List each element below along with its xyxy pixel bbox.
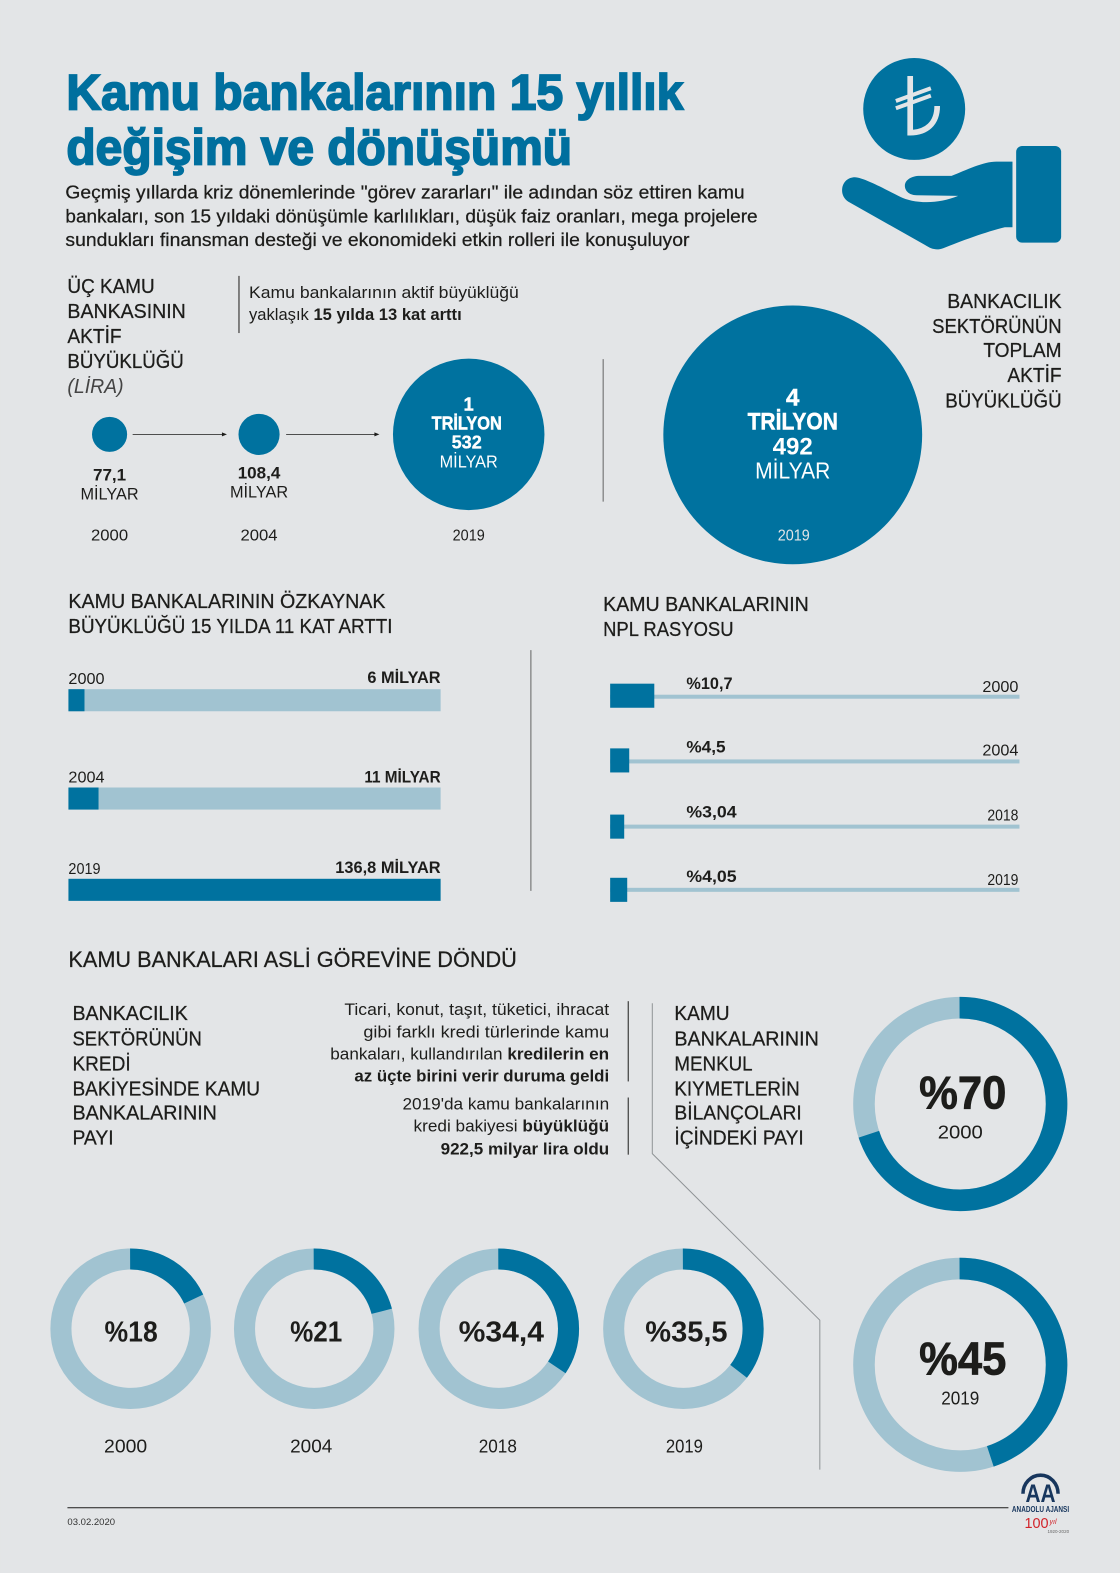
bubble 2019: TRİLYON [432,413,502,433]
donut: credit 2004: 2004 [290,1437,332,1457]
bubble 2019: MİLYAR [440,451,498,471]
donut: credit 2004 [244,1259,384,1457]
intro text [65,183,758,250]
NPL 2004: 2004 [982,741,1019,759]
logo: Anadolu Ajansı: 1920-2020 [1048,1529,1070,1534]
logo: Anadolu Ajansı: AA [1025,1480,1056,1508]
bar 2000: 6 MİLYAR [367,668,441,687]
callout: 13-fold [239,276,519,333]
NPL 2018: %3,04 [686,803,737,822]
bar 2004 [68,767,441,810]
NPL 2000 [610,674,1019,708]
heading: credit share: BANKACILIK [72,1003,188,1025]
title: değişim ve dönüşümü [66,120,572,176]
logo: Anadolu Ajansı: yıl [1049,1519,1057,1526]
donut: credit 2018: 2018 [479,1437,517,1457]
donut: securities 2000 [864,1008,1057,1200]
date: 03.02.2020 [67,1517,115,1528]
bubble 2019 [393,359,544,545]
donut: securities 2000: 2000 [938,1123,983,1143]
donut: credit 2000: 2000 [104,1437,147,1457]
callout: 13-fold: Kamu bankalarının aktif büyüklüğü [249,283,519,302]
bubble 2004: 2004 [240,527,278,545]
callout: loan types: az üçte birini verir duruma geldi [354,1066,609,1085]
bubble: sector total: TRİLYON [748,408,838,435]
heading: sector: SEKTÖRÜNÜN [932,316,1062,338]
bubble 2000 [80,417,139,545]
bar 2019: 2019 [68,860,101,878]
panel: sector assets [663,291,1062,564]
icon: hand holding lira coin [842,58,1061,249]
intro text: Geçmiş yıllarda kriz dönemlerinde "görev zararları" ile adından söz ettiren kamu [65,183,745,203]
NPL 2019: 2019 [987,871,1019,889]
callout: 13-fold: yaklaşık 15 yılda 13 kat arttı [249,305,462,324]
heading: sector: BANKACILIK [947,291,1062,313]
callout: loan types: Ticari, konut, taşıt, tüketici, ihracat [344,1000,610,1019]
NPL 2004: %4,5 [686,737,726,756]
heading: securities share: BİLANÇOLARI [674,1102,802,1125]
heading: securities share: BANKALARININ [674,1028,819,1050]
heading: sector: TOPLAM [983,340,1062,362]
donut: securities 2019 [864,1269,1057,1461]
bar 2004: 2004 [68,768,105,786]
heading: credit share: BANKALARININ [72,1103,217,1125]
callout: loan types: bankaları, kullandırılan kredilerin en [330,1044,609,1063]
intro text: sundukları finansman desteği ve ekonomideki etkin rolleri ile konuşuluyor [65,230,689,250]
heading: credit share: BAKİYESİNDE KAMU [72,1077,260,1100]
heading: credit share: SEKTÖRÜNÜN [72,1028,202,1050]
donut: securities 2000: %70 [919,1067,1006,1119]
bubble 2004: MİLYAR [230,483,288,502]
bubble: sector total: 4 [786,384,800,411]
bar 2004: 11 MİLYAR [364,767,441,786]
section heading: KAMU BANKALARI ASLİ GÖREVİNE DÖNDÜ [68,947,517,972]
callout: loan balance: 2019'da kamu bankalarının [402,1095,609,1114]
donut: credit 2000 [61,1259,200,1457]
donut: credit 2019 [614,1259,753,1457]
intro text: bankaları, son 15 yıldaki dönüşümle karlılıkları, düşük faiz oranları, mega projelere [65,207,758,227]
bubble 2000: 77,1 [93,466,126,485]
bubble 2004 [230,414,288,545]
heading: asset size: ÜÇ KAMU [67,276,155,298]
bubble: sector total: MİLYAR [755,458,830,484]
heading: asset size: AKTİF [67,325,122,348]
NPL 2019 [610,867,1019,902]
bubble 2019: 1 [464,394,474,414]
heading: sector: AKTİF [1007,364,1062,387]
donut: credit 2000: %18 [105,1316,158,1348]
heading: securities share: KIYMETLERİN [674,1077,800,1100]
panel: equity [68,591,441,901]
donut: credit 2018 [429,1259,569,1457]
footer rule [67,1507,1008,1509]
heading: sector [932,291,1062,412]
NPL 2018 [610,803,1019,839]
NPL 2000: %10,7 [686,674,733,693]
logo: Anadolu Ajansı: ANADOLU AJANSI [1012,1504,1069,1514]
donut: securities 2019: 2019 [941,1388,979,1408]
bar 2000 [68,668,441,711]
heading: securities share: İÇİNDEKİ PAYI [674,1127,804,1150]
heading: equity: KAMU BANKALARININ ÖZKAYNAK [68,591,386,613]
bar 2019 [68,858,441,901]
bubble: sector total [663,305,922,564]
bubble 2004: 108,4 [238,464,281,483]
heading: asset size: (LİRA) [67,376,124,398]
bubble 2000: MİLYAR [80,485,139,504]
logo: Anadolu Ajansı [1012,1475,1070,1534]
heading: credit share: KREDİ [72,1052,131,1075]
heading: sector: BÜYÜKLÜĞÜ [945,389,1062,412]
heading: securities share: KAMU [674,1003,730,1025]
bar 2000: 2000 [68,670,105,688]
heading: asset size [67,276,186,398]
heading: asset size: BANKASININ [67,301,186,323]
bubble 2019: 2019 [453,527,485,545]
donut: credit 2018: %34,4 [459,1316,545,1348]
NPL 2019: %4,05 [686,867,737,886]
heading: credit share [72,1003,260,1150]
panel: NPL [603,594,1019,902]
NPL 2000: 2000 [982,678,1019,696]
title [66,64,683,176]
donut: credit 2019: 2019 [666,1437,703,1457]
title: Kamu bankalarının 15 yıllık [66,64,683,120]
donut: securities 2019: %45 [919,1332,1006,1384]
heading: securities share [674,1003,819,1150]
bubble: sector total: 492 [773,433,813,460]
callout: loan balance: kredi bakiyesi büyüklüğü [414,1117,609,1136]
heading: credit share: PAYI [72,1128,114,1150]
callout: loan balance: 922,5 milyar lira oldu [441,1140,609,1159]
logo: Anadolu Ajansı: 100 [1024,1515,1049,1532]
bubble: sector total: 2019 [778,527,810,545]
heading: securities share: MENKUL [674,1053,753,1075]
donut: credit 2019: %35,5 [645,1316,728,1348]
callout: loan balance [402,1095,628,1159]
NPL 2004 [610,737,1019,772]
callout: loan types [330,1000,628,1085]
heading: equity: BÜYÜKLÜĞÜ 15 YILDA 11 KAT ARTTI [68,615,392,638]
bar 2019: 136,8 MİLYAR [335,858,441,877]
bubble 2019: 532 [452,432,482,452]
donut: credit 2004: %21 [290,1316,342,1348]
NPL 2018: 2018 [987,807,1019,825]
heading: NPL: NPL RASYOSU [603,619,734,641]
callout: loan types: gibi farklı kredi türlerinde kamu [363,1022,609,1041]
panel: public bank assets [67,276,544,545]
bubble 2000: 2000 [91,527,128,545]
heading: NPL [603,594,809,641]
heading: asset size: BÜYÜKLÜĞÜ [67,350,184,373]
heading: NPL: KAMU BANKALARININ [603,594,809,616]
arrow [286,432,379,436]
heading: equity [68,591,392,638]
arrow [133,432,227,436]
